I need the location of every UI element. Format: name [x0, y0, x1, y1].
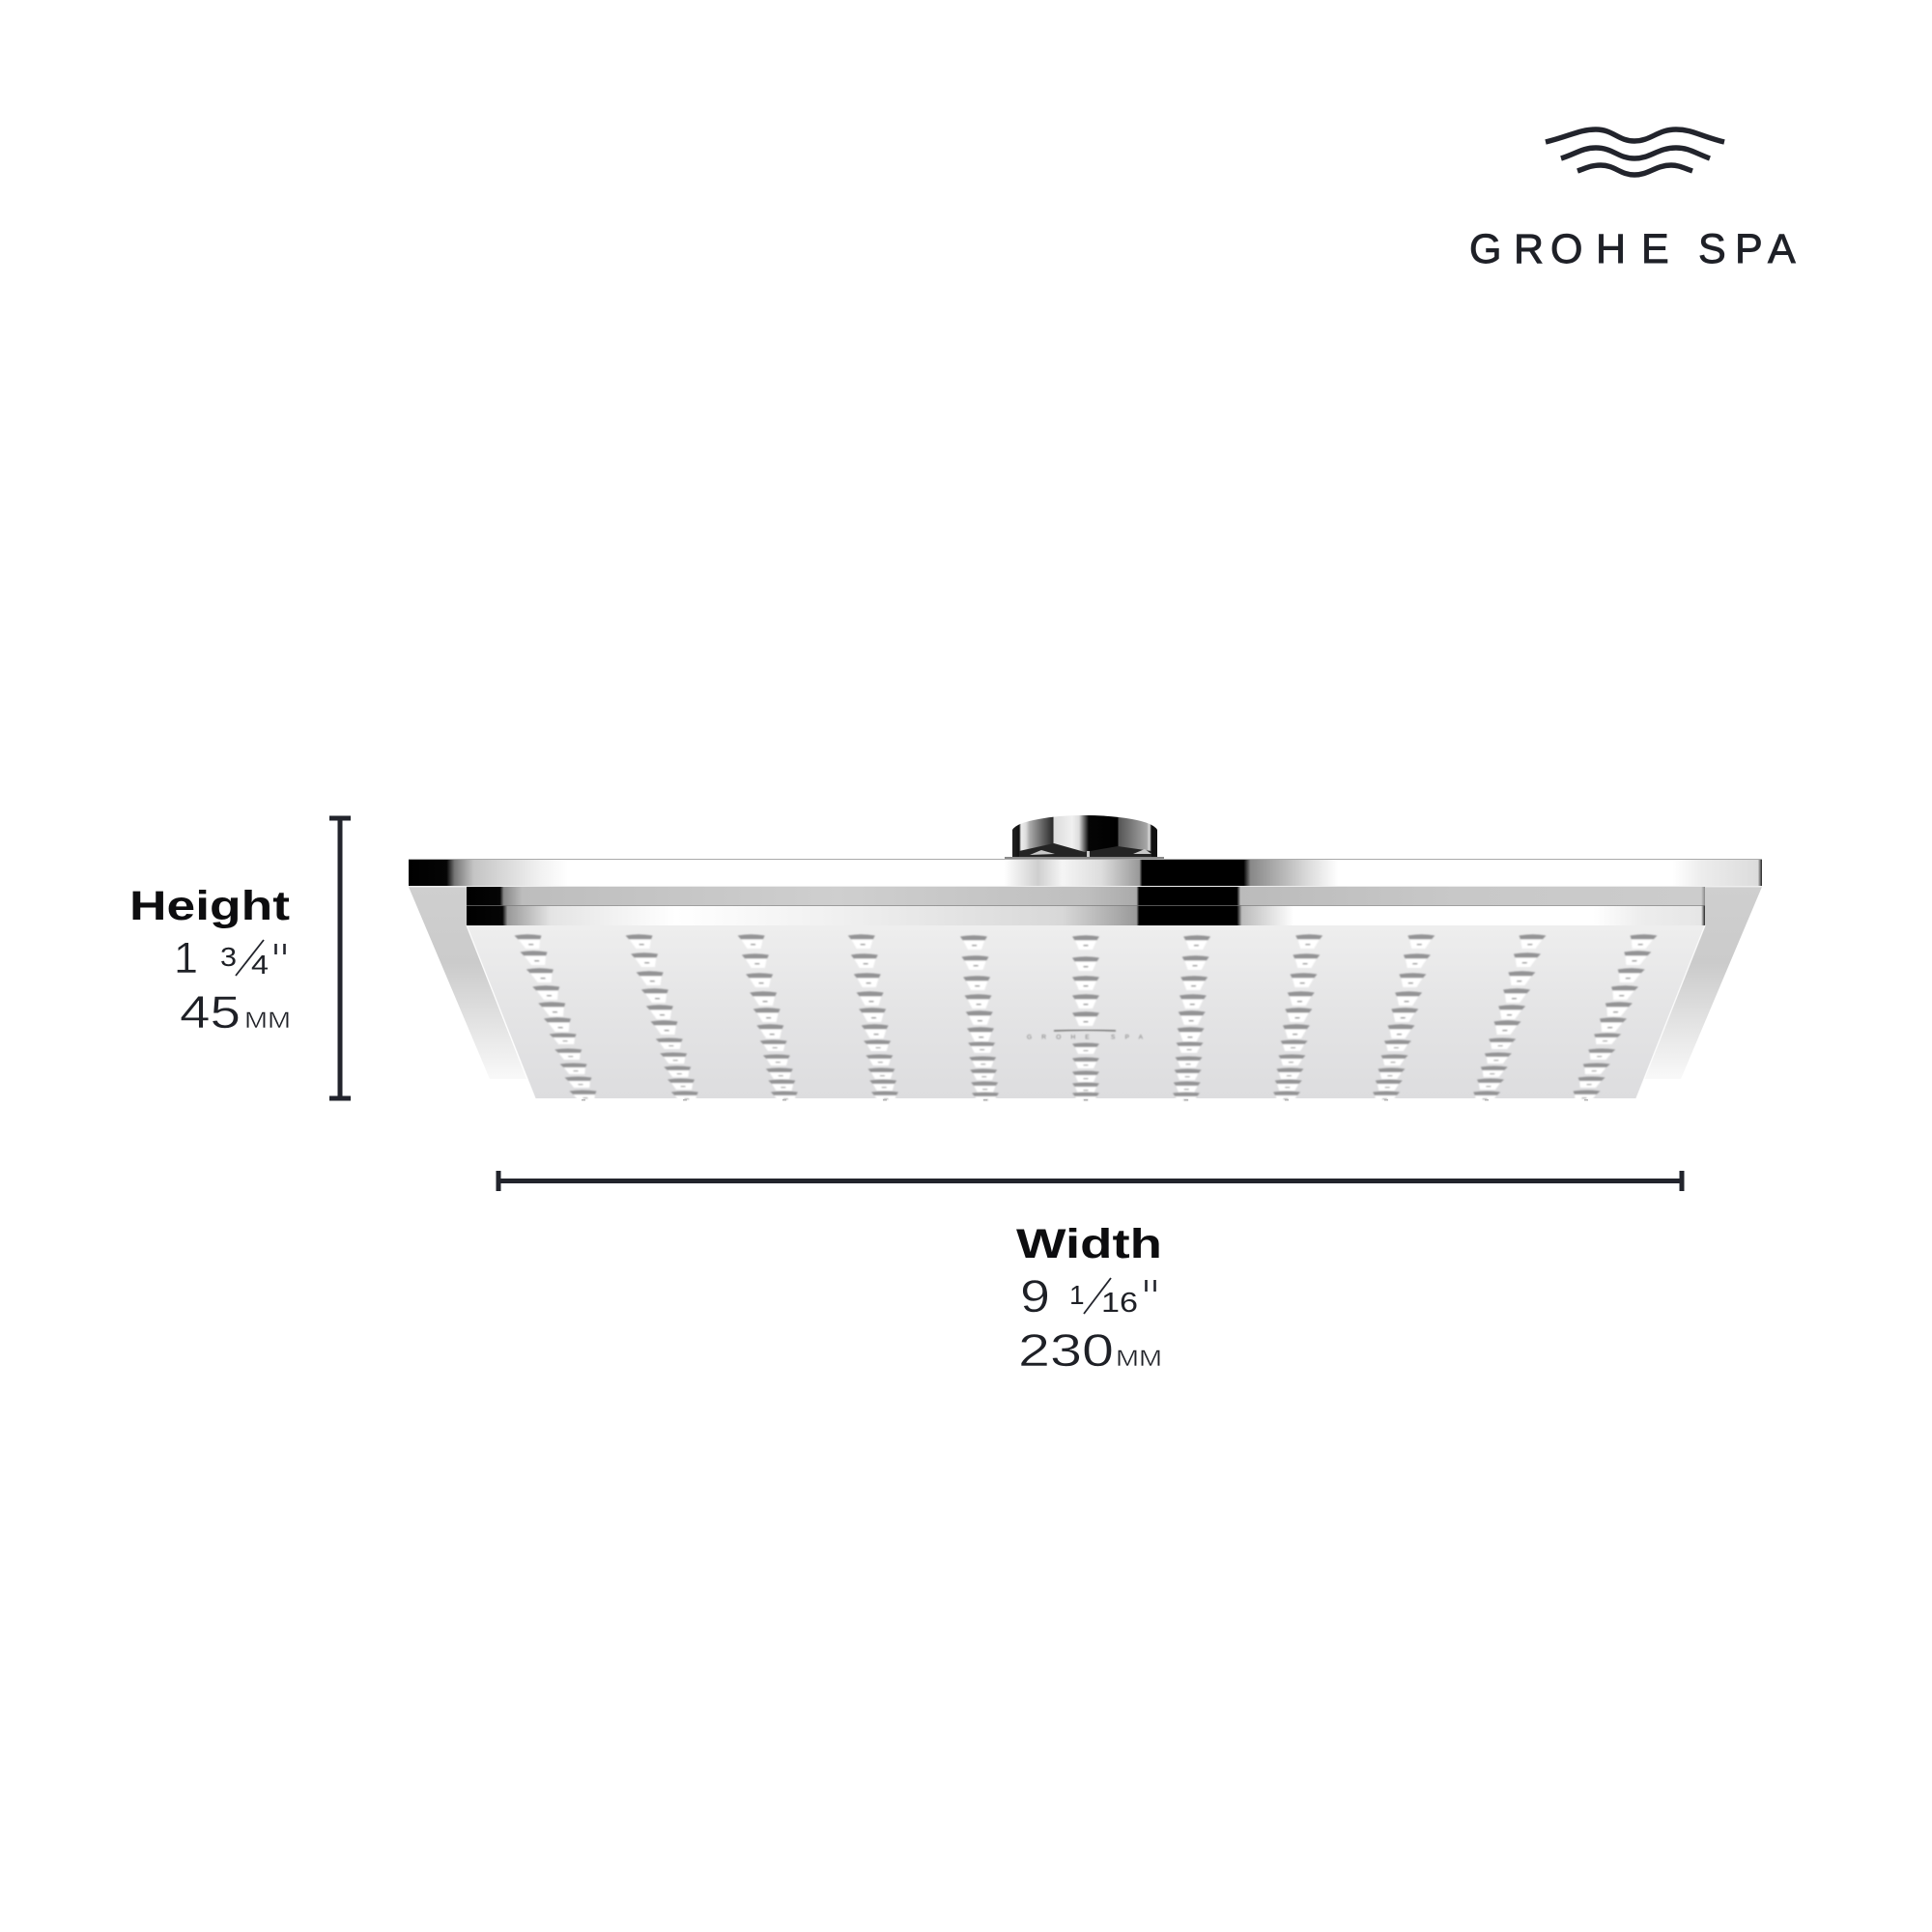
height dimension [129, 818, 351, 1098]
left side wing [409, 887, 526, 1079]
right side wing [1642, 887, 1762, 1079]
height inches: 1 [174, 933, 198, 982]
second chrome band [467, 887, 1705, 905]
height label: Height [129, 883, 290, 929]
logo wordmark: GROHESPA [1469, 226, 1796, 272]
width bracket [498, 1171, 1682, 1191]
face plate logo: GROHE SPA [1027, 1034, 1144, 1041]
height millimetres: MM [244, 1008, 291, 1034]
height inches: 3 [220, 942, 237, 972]
dots below plate edge [582, 1099, 1588, 1101]
third chrome band [467, 905, 1705, 925]
logo: GROHE SPA [1469, 129, 1796, 272]
width inches: 16 [1101, 1288, 1138, 1319]
width label: Width [1016, 1221, 1162, 1267]
icon: water waves [1546, 129, 1724, 175]
width millimetres [1018, 1324, 1162, 1376]
width dimension [498, 1171, 1682, 1376]
shower face plate [467, 925, 1705, 1098]
height inches [174, 933, 284, 982]
height millimetres [180, 986, 291, 1037]
height bracket [329, 818, 351, 1098]
width inches: 1 [1069, 1280, 1085, 1310]
spray nozzles [514, 934, 1658, 1103]
height millimetres: 45 [180, 986, 241, 1037]
height inches: 4 [251, 950, 269, 980]
shower head product [409, 815, 1762, 1103]
width millimetres: MM [1116, 1346, 1162, 1372]
top chrome bar [409, 859, 1762, 887]
collar connector [1005, 815, 1164, 859]
width millimetres: 230 [1018, 1324, 1114, 1376]
width inches [1020, 1270, 1155, 1321]
face plate logo [1027, 1030, 1144, 1041]
width inches: 9 [1020, 1270, 1050, 1321]
